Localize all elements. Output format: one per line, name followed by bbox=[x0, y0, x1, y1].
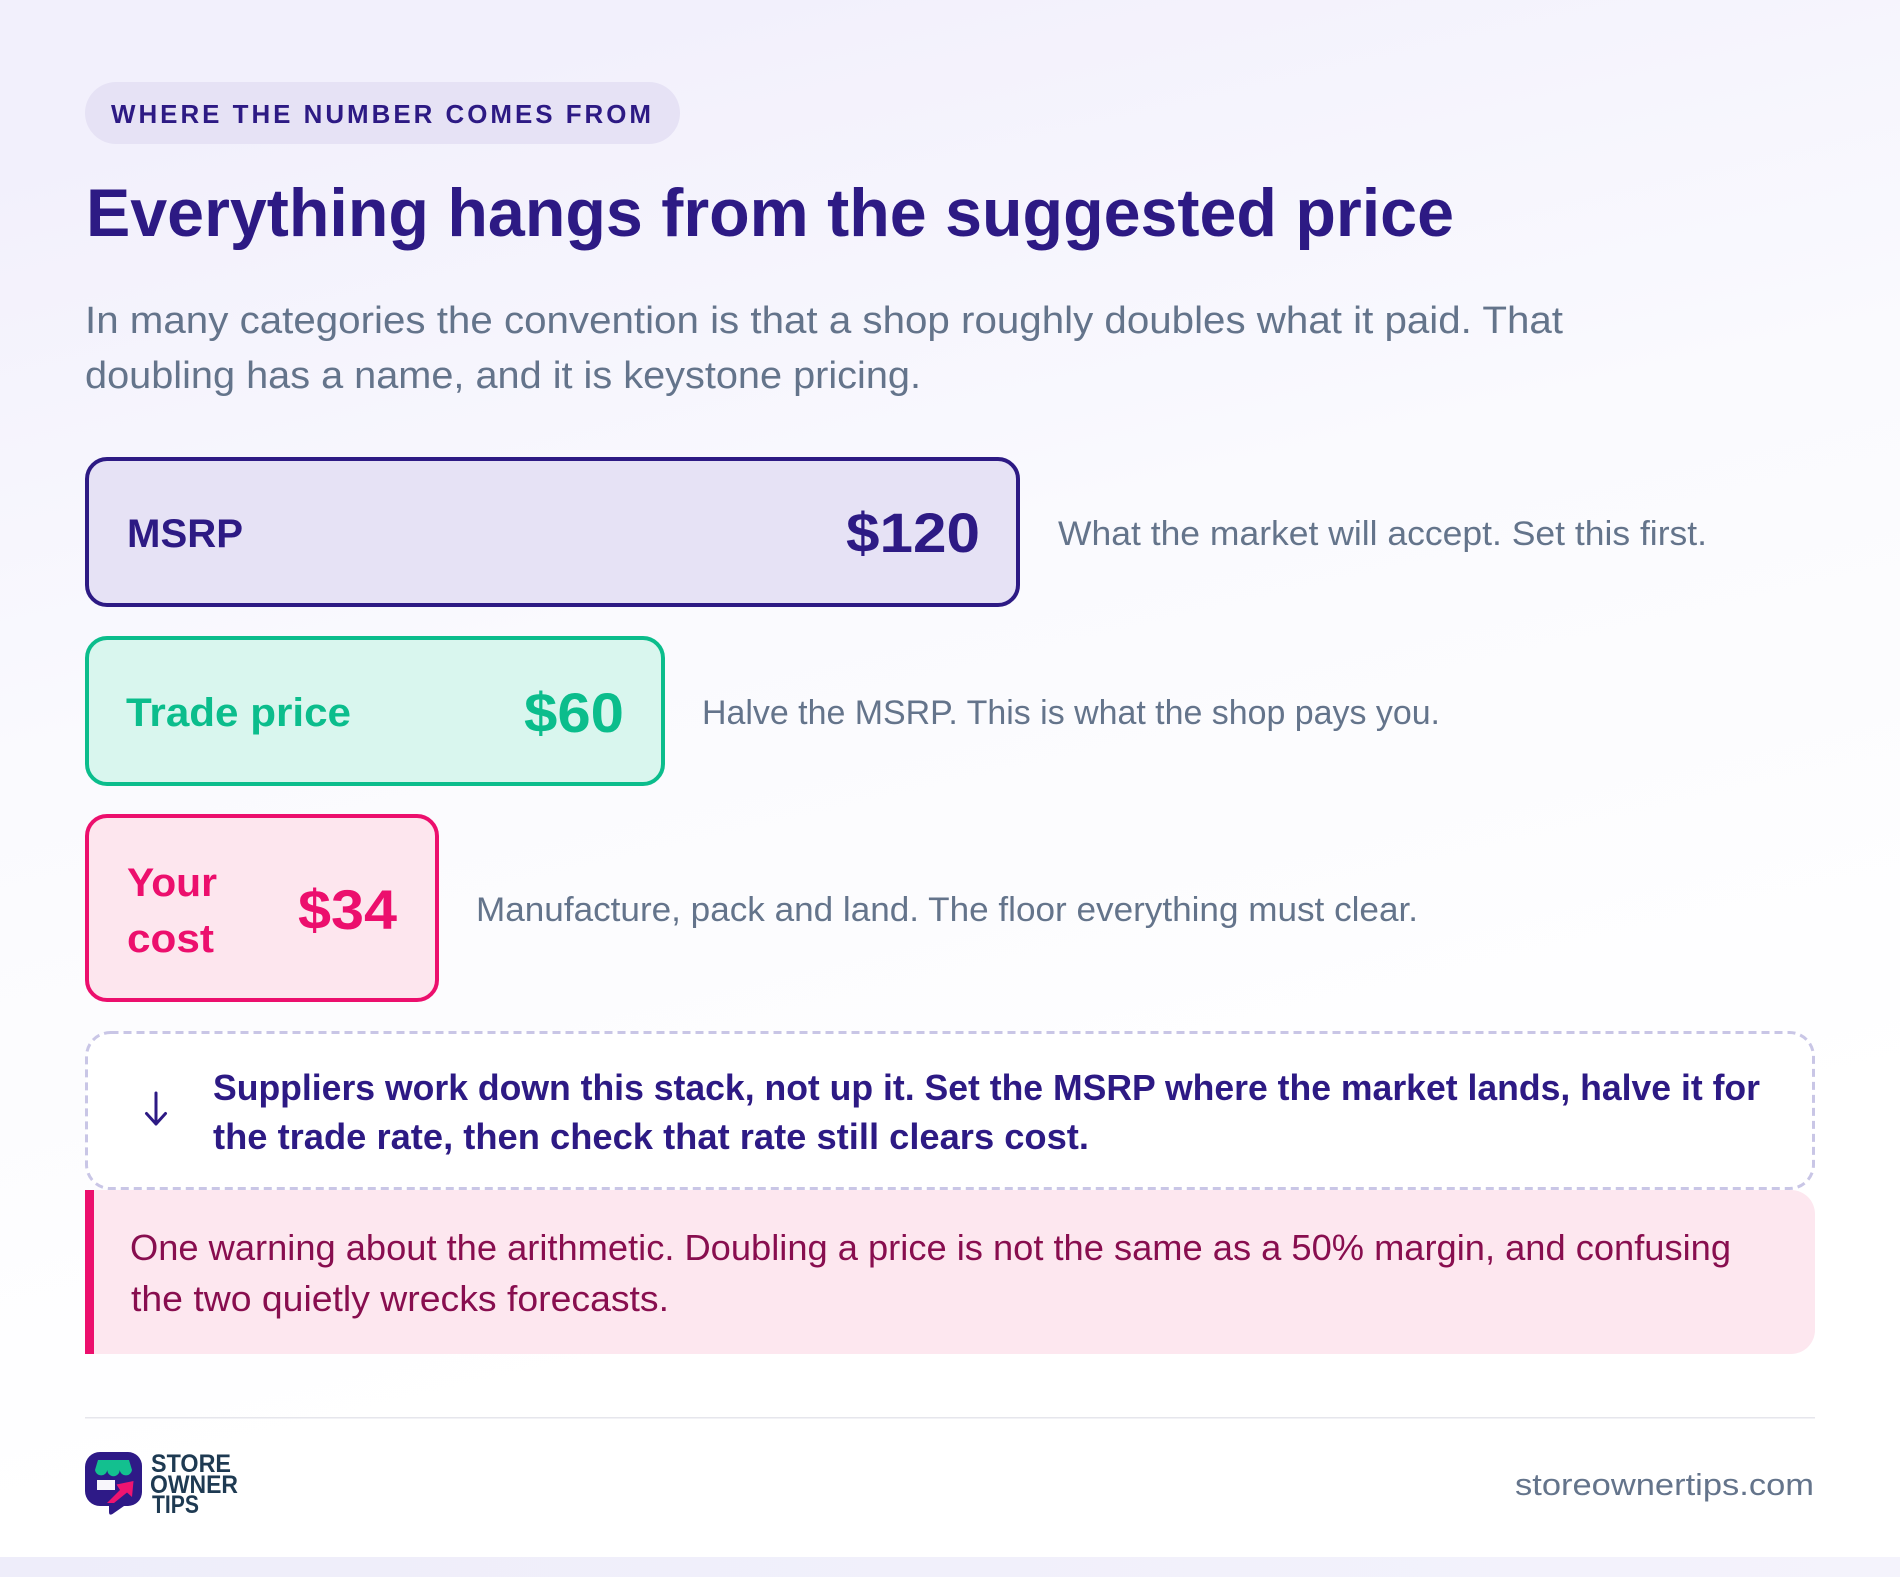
panel: your cost row bbox=[87, 816, 1418, 1000]
MSRP value: $120 bbox=[846, 501, 980, 564]
icon: speech-bubble storefront bbox=[85, 1452, 142, 1515]
trade price label: Trade price bbox=[126, 691, 351, 735]
logo wordmark: STORE bbox=[151, 1450, 231, 1478]
footer logo: Store Owner Tips bbox=[85, 1450, 238, 1519]
callout text: the trade rate, then check that rate still clears cost. bbox=[213, 1116, 1089, 1157]
MSRP bar bbox=[87, 459, 1018, 605]
your cost value: $34 bbox=[298, 878, 397, 941]
eyebrow pill: WHERE THE NUMBER COMES FROM bbox=[111, 99, 654, 129]
header: eyebrow, title and intro bbox=[85, 82, 1563, 397]
intro paragraph: doubling has a name, and it is keystone pricing. bbox=[85, 355, 921, 397]
trade price bar bbox=[87, 638, 663, 784]
footer website: storeownertips.com bbox=[1515, 1467, 1814, 1502]
callout text: Suppliers work down this stack, not up it. Set the MSRP where the market lands, halve it for bbox=[213, 1067, 1760, 1108]
icon: down arrow bbox=[146, 1093, 166, 1124]
warning text: the two quietly wrecks forecasts. bbox=[131, 1278, 669, 1319]
panel: MSRP row bbox=[87, 459, 1707, 605]
warning panel bbox=[85, 1190, 1815, 1354]
title: Everything hangs from the suggested price bbox=[86, 175, 1454, 251]
your cost bar bbox=[87, 816, 437, 1000]
warning text bbox=[130, 1227, 1731, 1319]
intro paragraph bbox=[85, 300, 1563, 397]
MSRP label: MSRP bbox=[127, 512, 243, 556]
your cost note: Manufacture, pack and land. The floor everything must clear. bbox=[476, 891, 1418, 929]
panel: trade price row bbox=[87, 638, 1440, 784]
logo wordmark bbox=[150, 1450, 238, 1519]
warning text: One warning about the arithmetic. Doubling a price is not the same as a 50% margin, and confusing bbox=[130, 1227, 1731, 1268]
logo wordmark: OWNER bbox=[150, 1471, 238, 1499]
trade price note: Halve the MSRP. This is what the shop pays you. bbox=[702, 694, 1440, 732]
your cost label: Your bbox=[127, 861, 217, 905]
callout text bbox=[213, 1067, 1760, 1157]
eyebrow pill bbox=[85, 82, 680, 144]
MSRP note: What the market will accept. Set this first. bbox=[1058, 515, 1707, 553]
intro paragraph: In many categories the convention is that a shop roughly doubles what it paid. That bbox=[85, 300, 1563, 342]
callout: work down the stack bbox=[86, 1032, 1814, 1188]
logo wordmark: TIPS bbox=[152, 1491, 199, 1519]
your cost label bbox=[127, 861, 217, 961]
trade price value: $60 bbox=[524, 681, 624, 744]
your cost label: cost bbox=[127, 917, 214, 961]
